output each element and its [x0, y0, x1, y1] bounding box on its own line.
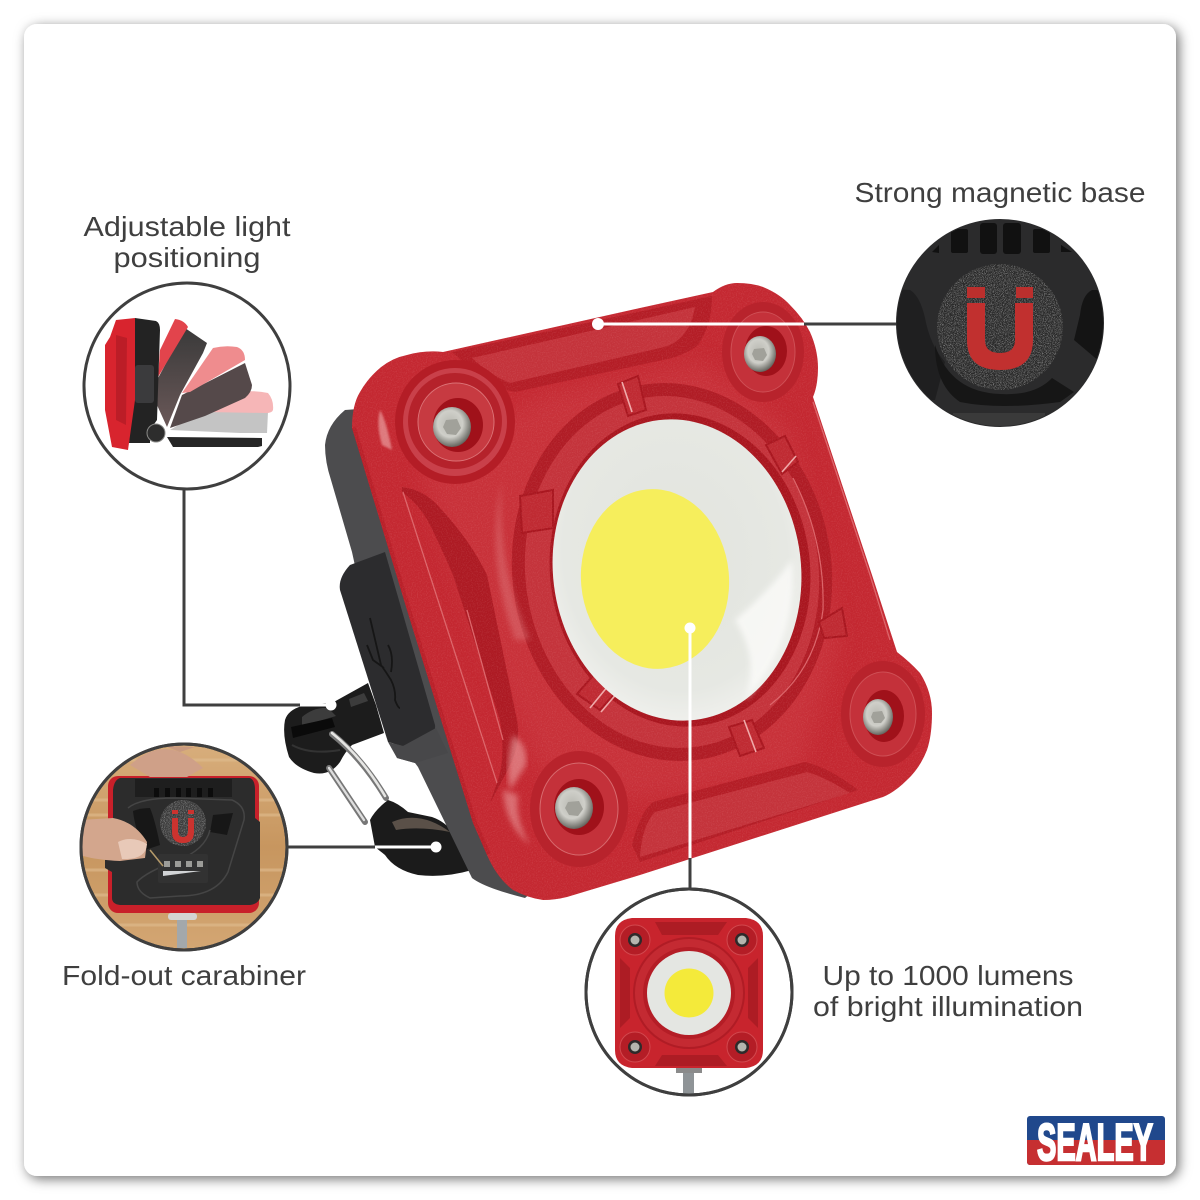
- upright red front: [105, 318, 135, 450]
- mini led: [664, 968, 714, 1018]
- inset: carabiner photo: [80, 744, 290, 950]
- bolt: [177, 918, 187, 948]
- right window: [210, 813, 233, 835]
- top fingers: [130, 749, 203, 777]
- screw bottom right: [841, 661, 925, 767]
- left window: [133, 808, 160, 850]
- lens rim: [532, 398, 828, 742]
- right edge highlight: [813, 402, 890, 640]
- vents: [154, 788, 213, 797]
- vent slots: [932, 223, 1072, 254]
- device red frame: [108, 776, 259, 913]
- hinge bar: [135, 779, 232, 797]
- upright housing: [129, 318, 160, 443]
- red front ridge: [116, 335, 127, 425]
- upper finger tip: [165, 746, 195, 752]
- lighter centre cross: [352, 360, 840, 855]
- heading: adjustable light positioning: [84, 211, 291, 273]
- device black back: [105, 778, 260, 905]
- lens diffuser: [536, 405, 818, 735]
- heading: fold-out carabiner: Fold-out carabiner: [62, 960, 306, 991]
- work light main product: [284, 283, 932, 900]
- right side cut-out: [1074, 290, 1103, 359]
- edge shading: [352, 428, 487, 855]
- inset: magnet: [892, 219, 1105, 429]
- connector: magnetic base: [592, 318, 900, 330]
- carabiner wire: [329, 733, 386, 822]
- mini ring: [634, 938, 744, 1048]
- heading: adjustable light positioning: positioning: [114, 242, 260, 273]
- heading: lumens: of bright illumination: [813, 991, 1083, 1022]
- wood grain: [80, 760, 290, 925]
- specular patches: [508, 735, 526, 790]
- connector: adjustable position: [184, 488, 336, 710]
- label panel: [158, 854, 192, 869]
- ring detail: [643, 947, 735, 1039]
- lens highlight: [735, 560, 793, 700]
- red body: [352, 283, 932, 900]
- inset: lumens: [586, 889, 792, 1096]
- bottom panel face: [640, 772, 850, 857]
- magnet disc: [160, 800, 206, 846]
- bottom recess: [655, 1055, 727, 1066]
- heading: lumens: [813, 960, 1083, 1022]
- top panel dark band: [452, 296, 712, 392]
- centre disc shadow: [935, 345, 1074, 406]
- upright flap: [135, 365, 154, 403]
- bottom panel dark band: [632, 762, 858, 862]
- hinge base: [167, 437, 262, 447]
- battery leds: [164, 861, 203, 867]
- connector: lumens: [684, 622, 696, 892]
- tilted ghost position: [170, 346, 252, 428]
- mini screws: [620, 925, 757, 1062]
- magnet pole right: [1016, 287, 1033, 298]
- mini body: [615, 918, 763, 1068]
- yellow led: [573, 483, 737, 675]
- lens surround outer arc: [495, 369, 849, 775]
- top recess: [655, 922, 727, 935]
- steep ghost position: [157, 319, 207, 427]
- left recess: [620, 958, 630, 1028]
- fingernail: [118, 839, 147, 859]
- usb port cover: [340, 552, 448, 763]
- heading: adjustable light positioning: Adjustable light: [84, 211, 291, 242]
- battery indicator: [163, 871, 201, 876]
- carabiner outline: [128, 798, 244, 898]
- grey rear housing: [325, 400, 570, 898]
- bolt: [683, 1070, 694, 1096]
- carabiner lower clip: [370, 800, 472, 876]
- heading: lumens: Up to 1000 lumens: [822, 960, 1074, 991]
- screw top right: [722, 302, 804, 402]
- top panel face: [472, 307, 695, 383]
- flat ghost position: [170, 391, 273, 433]
- magnet pole left: [967, 287, 985, 298]
- inset: adjustable positions: [84, 283, 290, 489]
- mini lens: [647, 951, 731, 1035]
- aluminium speckle: [352, 283, 932, 900]
- hinge: [147, 424, 165, 442]
- ring highlight: [770, 478, 823, 705]
- speckled disc: [937, 264, 1063, 390]
- screw top left: [395, 360, 515, 484]
- left dark band: [402, 487, 518, 803]
- lower finger and hand: [80, 818, 147, 861]
- right recess: [748, 958, 758, 1028]
- nut: [676, 1067, 702, 1073]
- magnet u: [967, 303, 1033, 370]
- notch highlights: [590, 382, 796, 752]
- magnet icon: [172, 810, 194, 843]
- screw bottom left: [530, 751, 628, 867]
- left side cut-out: [892, 289, 945, 400]
- ring notches: [520, 376, 847, 756]
- left thin highlights: [403, 492, 503, 783]
- carabiner hinge arm: [284, 683, 384, 774]
- heading: strong magnetic base: Strong magnetic base: [854, 177, 1146, 208]
- connector: carabiner: [286, 842, 442, 852]
- thumb nut: [168, 913, 197, 920]
- pin: [150, 850, 163, 866]
- bottom label strip: [953, 413, 1045, 429]
